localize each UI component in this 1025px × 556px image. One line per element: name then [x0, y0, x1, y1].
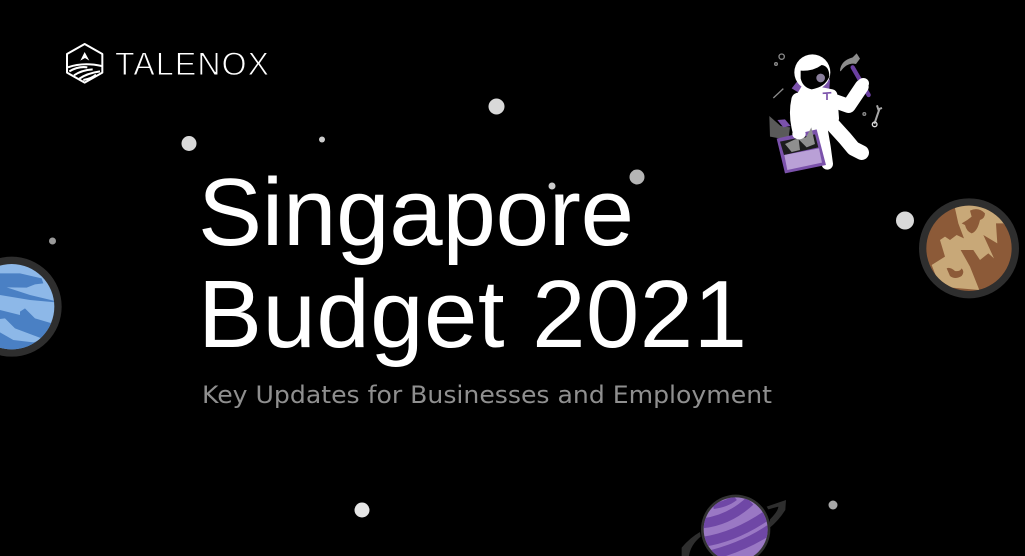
planet: purple with ring [682, 495, 786, 556]
title line 2: Budget 2021 [198, 261, 747, 368]
astronaut body [797, 87, 862, 164]
logo: Talenox [67, 44, 269, 83]
backpack [792, 79, 830, 117]
bent leg [828, 120, 862, 153]
straight leg [822, 127, 827, 164]
toolbox [777, 129, 826, 173]
title [198, 159, 747, 368]
raised arm [832, 87, 862, 106]
title line 1: Singapore [198, 159, 634, 266]
lower arm [797, 100, 800, 132]
wrench [874, 105, 882, 124]
glove on toolbox [792, 129, 806, 139]
tools behind box [769, 116, 790, 140]
glove [858, 78, 869, 89]
helmet [794, 54, 830, 90]
planet: brown [919, 198, 1019, 298]
icon: hexagon logo mark [67, 44, 102, 83]
subtitle: Key Updates for Businesses and Employment [202, 381, 772, 409]
stars [49, 98, 914, 518]
illustration: astronaut with toolbox [769, 53, 882, 173]
planet: blue [0, 257, 62, 357]
ring [682, 532, 701, 556]
hammer [840, 53, 869, 95]
logo wordmark: TALENOX [115, 46, 269, 82]
chest logo [823, 93, 831, 100]
small debris [773, 54, 866, 115]
visor [801, 65, 829, 89]
visor reflection [816, 74, 825, 82]
